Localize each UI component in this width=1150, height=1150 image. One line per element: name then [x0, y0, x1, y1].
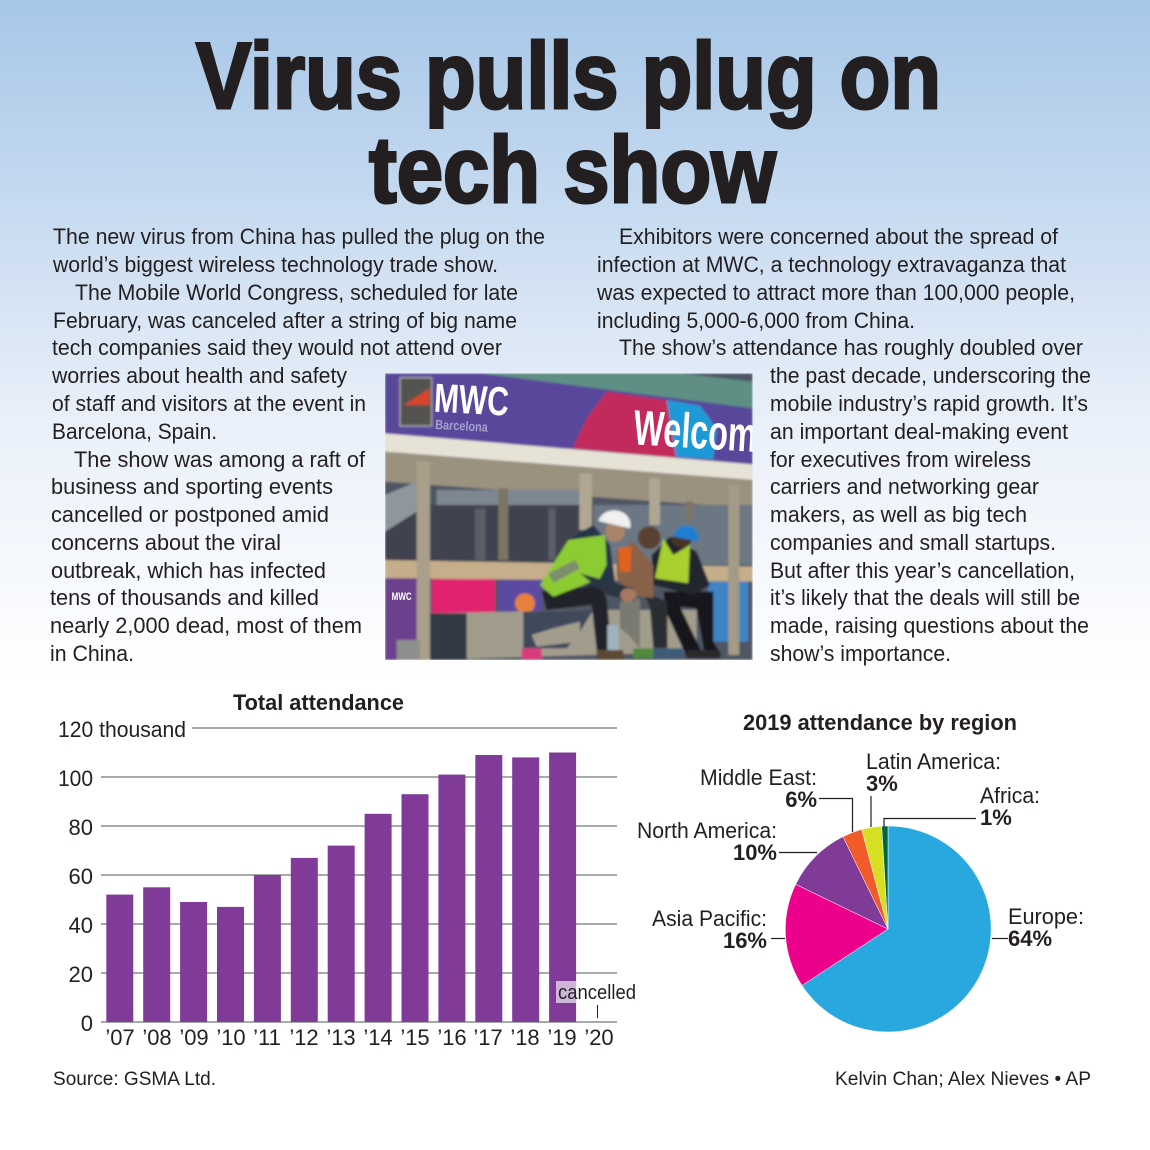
- x-axis labels: ’09: [179, 1025, 209, 1050]
- x-axis labels: ’18: [510, 1025, 540, 1050]
- text block: right column: infection at MWC, a technology extravaganza that: [597, 252, 1066, 277]
- label: Europe: [1008, 904, 1084, 951]
- bar chart: total attendance: [58, 690, 636, 1050]
- pie chart: 2019 attendance by region: [637, 710, 1084, 1032]
- text block: left column: [50, 224, 545, 666]
- callout: cancelled: cancelled: [558, 982, 636, 1004]
- text block: right column: companies and small startups.: [770, 530, 1056, 555]
- x-axis labels: ’17: [473, 1025, 503, 1050]
- leader lines: [771, 796, 1008, 938]
- text block: left column: in China.: [50, 641, 134, 666]
- source credit: Source: GSMA Ltd.: [53, 1068, 216, 1090]
- label: Latin America: Latin America:: [866, 749, 1001, 774]
- text block: left column: cancelled or postponed amid: [51, 502, 329, 527]
- text block: right column: But after this year’s cancellation,: [770, 558, 1075, 583]
- y-axis labels: 20: [69, 962, 93, 987]
- label: Middle East: 6%: [785, 787, 817, 812]
- photo: workers at MWC Barcelona: MWC: [433, 375, 510, 425]
- text block: right column: show’s importance.: [770, 641, 951, 666]
- text block: right column: makers, as well as big tech: [770, 502, 1027, 527]
- text block: left column: tech companies said they would not attend over: [52, 335, 502, 360]
- text block: left column: world’s biggest wireless technology trade show.: [52, 252, 498, 277]
- label: Asia Pacific: 16%: [723, 928, 767, 953]
- text block: left column: The show was among a raft of: [74, 447, 366, 472]
- photo: workers at MWC Barcelona: MWC: [392, 591, 412, 603]
- text block: right column: it’s likely that the deals will still be: [770, 585, 1080, 610]
- text block: left column: of staff and visitors at the event in: [52, 391, 366, 416]
- label: Europe: Europe:: [1008, 904, 1084, 929]
- x-axis labels: ’19: [547, 1025, 577, 1050]
- y-axis labels: 40: [69, 913, 93, 938]
- x-axis labels: ’14: [363, 1025, 393, 1050]
- chart heading: attendance by region: 2019 attendance by region: [743, 710, 1017, 735]
- text block: left column: outbreak, which has infected: [51, 558, 326, 583]
- x-axis labels: ’07: [105, 1025, 135, 1050]
- text block: right column: the past decade, underscoring the: [770, 363, 1091, 388]
- y-axis labels: 100: [58, 766, 93, 791]
- x-axis labels: ’12: [289, 1025, 319, 1050]
- label: Latin America: 3%: [866, 771, 898, 796]
- text block: right column: was expected to attract more than 100,000 people,: [596, 280, 1075, 305]
- label: Middle East: Middle East:: [700, 765, 817, 790]
- title: Virus pulls plug on: [196, 23, 941, 128]
- text block: right column: made, raising questions about the: [770, 613, 1089, 638]
- text block: left column: nearly 2,000 dead, most of them: [50, 613, 362, 638]
- chart heading: total attendance: Total attendance: [233, 690, 404, 715]
- text block: left column: Barcelona, Spain.: [52, 419, 217, 444]
- photo: workers at MWC Barcelona: Barcelona: [435, 417, 489, 435]
- y-axis labels: 80: [69, 815, 93, 840]
- photo: workers at MWC Barcelona: [385, 373, 758, 660]
- text block: right column: The show’s attendance has roughly doubled over: [619, 335, 1083, 360]
- y-axis labels: [58, 717, 186, 1036]
- callout: cancelled: [556, 981, 636, 1018]
- pie slices: [785, 826, 991, 1032]
- x-axis labels: ’20: [584, 1025, 614, 1050]
- text block: right column: Exhibitors were concerned about the spread of: [619, 224, 1059, 249]
- x-axis labels: ’15: [400, 1025, 430, 1050]
- title: [196, 23, 941, 222]
- x-axis labels: ’13: [326, 1025, 356, 1050]
- x-axis labels: ’11: [253, 1025, 281, 1050]
- text block: left column: worries about health and safety: [51, 363, 347, 388]
- y-axis labels: 0: [81, 1011, 93, 1036]
- bars: [106, 752, 576, 1022]
- text block: left column: February, was canceled after a string of big name: [53, 308, 517, 333]
- text block: right column: [596, 224, 1091, 666]
- y-axis labels: 120 thousand: [58, 717, 186, 742]
- text block: right column: carriers and networking gear: [770, 474, 1039, 499]
- text block: left column: concerns about the viral: [51, 530, 281, 555]
- text block: left column: The new virus from China has pulled the plug on the: [53, 224, 545, 249]
- label: Asia Pacific: Asia Pacific:: [652, 906, 767, 931]
- label: Latin America: [866, 749, 1001, 796]
- x-axis labels: ’10: [216, 1025, 246, 1050]
- text block: right column: an important deal-making event: [770, 419, 1068, 444]
- label: Middle East: [700, 765, 817, 812]
- middle worker: [643, 592, 667, 648]
- label: Africa: Africa:: [980, 783, 1040, 808]
- text block: right column: mobile industry’s rapid growth. It’s: [770, 391, 1088, 416]
- x-axis labels: ’16: [437, 1025, 467, 1050]
- label: Africa: [980, 783, 1040, 830]
- x-axis labels: ’08: [142, 1025, 172, 1050]
- label: North America: 10%: [733, 840, 777, 865]
- x-axis labels: [105, 1025, 614, 1050]
- label: North America: North America:: [637, 818, 777, 843]
- text block: left column: business and sporting events: [51, 474, 333, 499]
- label: Asia Pacific: [652, 906, 767, 953]
- text block: left column: The Mobile World Congress, scheduled for late: [75, 280, 518, 305]
- text block: right column: including 5,000-6,000 from China.: [597, 308, 915, 333]
- title: tech show: [369, 117, 777, 222]
- label: Europe: 64%: [1008, 926, 1052, 951]
- left worker: [542, 585, 612, 650]
- y-axis labels: 60: [69, 864, 93, 889]
- byline credit: Kelvin Chan; Alex Nieves • AP: [835, 1068, 1091, 1090]
- right worker: [663, 592, 722, 657]
- photo: workers at MWC Barcelona: Welcom: [632, 400, 758, 463]
- text block: right column: for executives from wireless: [770, 447, 1031, 472]
- label: Africa: 1%: [980, 805, 1012, 830]
- label: North America: [637, 818, 777, 865]
- text block: left column: tens of thousands and killed: [50, 585, 319, 610]
